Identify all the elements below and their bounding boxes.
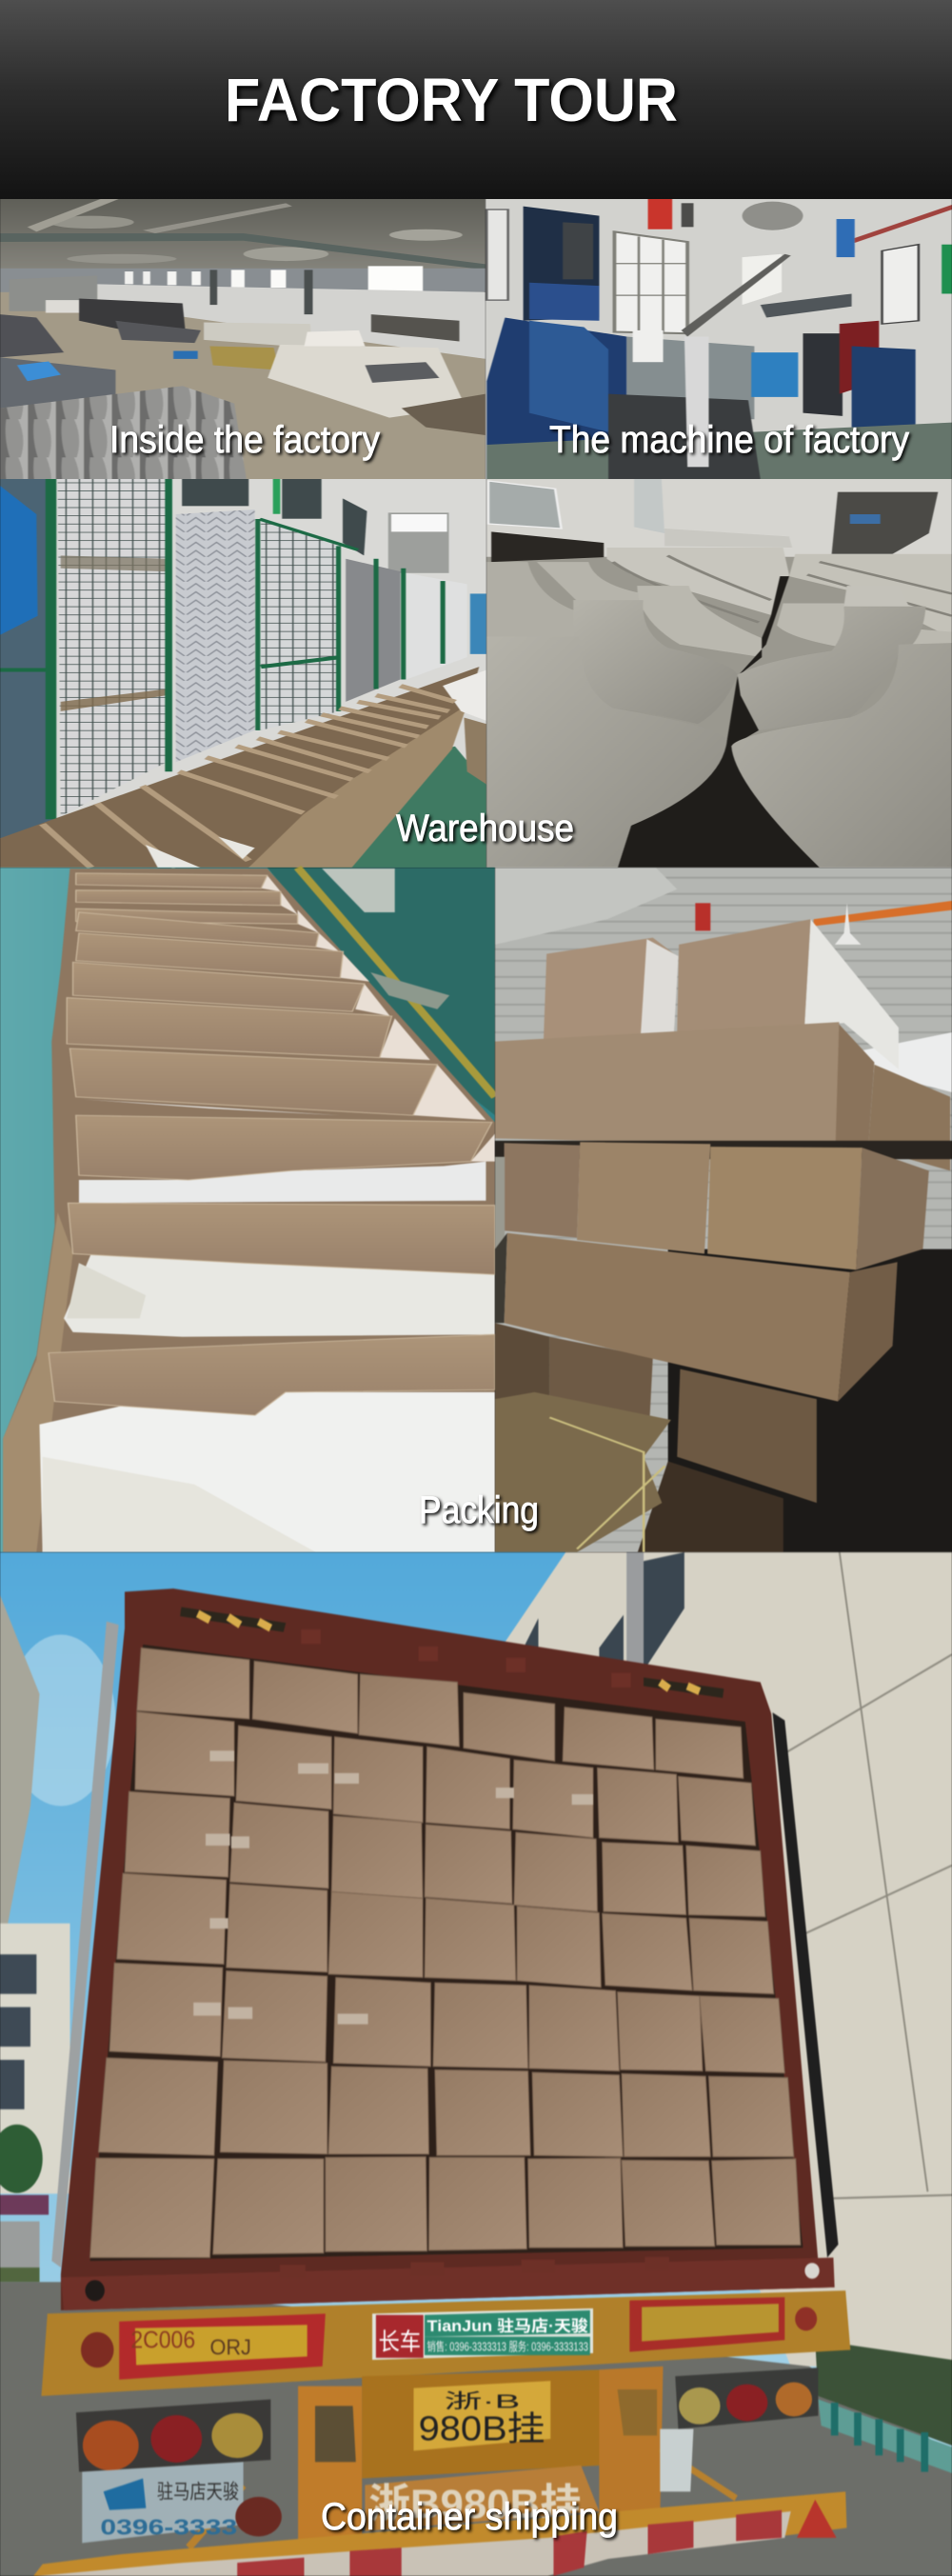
panel: machine of factory photo xyxy=(485,199,952,479)
panel: container shipping photo xyxy=(0,1551,952,2576)
container corner fittings and lock handles xyxy=(85,1629,820,2301)
left dealer plate xyxy=(82,2462,282,2543)
trailer rear beam: 长车 xyxy=(378,2329,421,2356)
center cage with clutter xyxy=(626,336,754,419)
label: the machine of factory: The machine of factory xyxy=(549,419,909,461)
packing tape marks xyxy=(193,1750,593,2025)
trailer rear beam: 销售: 0396-3333313 服务: 0396-3333133 xyxy=(427,2339,588,2353)
panel: warehouse mannequin busts photo xyxy=(486,479,952,868)
trailer rear beam xyxy=(41,2290,850,2396)
trailer rear beam: TianJun 驻马店·天骏 xyxy=(427,2317,588,2335)
trailer rear beam: ORJ xyxy=(209,2335,251,2360)
top white-edged cartons xyxy=(544,919,899,1069)
rear bumper with reflective stripes xyxy=(33,2491,846,2576)
stacked products xyxy=(0,298,486,479)
shipping container frame xyxy=(51,1588,839,2310)
panel: inside the factory photo xyxy=(0,199,486,479)
white sliver dividers xyxy=(261,875,495,1162)
front row busts xyxy=(486,636,952,868)
panel: warehouse fence photo xyxy=(0,479,487,869)
label: warehouse: Warehouse xyxy=(396,808,574,849)
left dealer plate: 0396-3333 xyxy=(100,2515,237,2540)
large carton and lower stack xyxy=(495,1233,898,1552)
left tail lights xyxy=(76,2399,270,2472)
panel: packing partition boxes photo xyxy=(0,866,496,1552)
blue machine left xyxy=(486,207,626,479)
hedge and teal fence xyxy=(815,2340,952,2473)
middle cartons xyxy=(495,1022,952,1269)
cardboard dividers xyxy=(67,873,437,1115)
side wall of boxes xyxy=(3,869,495,1552)
left buildings xyxy=(0,1595,69,2282)
cardboard partition boxes xyxy=(0,667,486,868)
ground xyxy=(0,2282,952,2576)
dark gaps between busts xyxy=(618,576,820,868)
panel: packing stacked cartons photo xyxy=(494,867,952,1552)
trailer lower chassis and number plate: 浙B980B挂 xyxy=(368,2482,582,2526)
netted white stock xyxy=(0,479,486,838)
trailer lower chassis and number plate: 浙·B xyxy=(444,2390,520,2413)
front dividers xyxy=(49,1115,495,1415)
label: packing: Packing xyxy=(419,1489,539,1531)
far rows of busts xyxy=(486,548,952,657)
white fabric in boxes xyxy=(39,1099,495,1552)
red and blue blow molding machine right xyxy=(682,205,952,428)
lower right dark background xyxy=(668,1249,952,1552)
back wall with windows xyxy=(0,266,486,359)
label: container shipping: Container shipping xyxy=(321,2496,618,2538)
trailer rear beam: 2C006 xyxy=(130,2327,195,2354)
title: FACTORY TOUR xyxy=(225,66,678,134)
mid row busts xyxy=(573,600,926,730)
cartons in container xyxy=(90,1647,801,2258)
right tail lights xyxy=(675,2367,818,2429)
green fence posts xyxy=(0,479,443,819)
trailer lower chassis and number plate: 980B挂 xyxy=(419,2410,545,2448)
right building xyxy=(499,1552,952,2366)
header banner xyxy=(0,0,952,199)
trailer lower chassis and number plate xyxy=(188,2366,736,2547)
label: inside the factory: Inside the factory xyxy=(109,419,380,461)
left dealer plate: 驻马店天骏 xyxy=(157,2481,239,2504)
